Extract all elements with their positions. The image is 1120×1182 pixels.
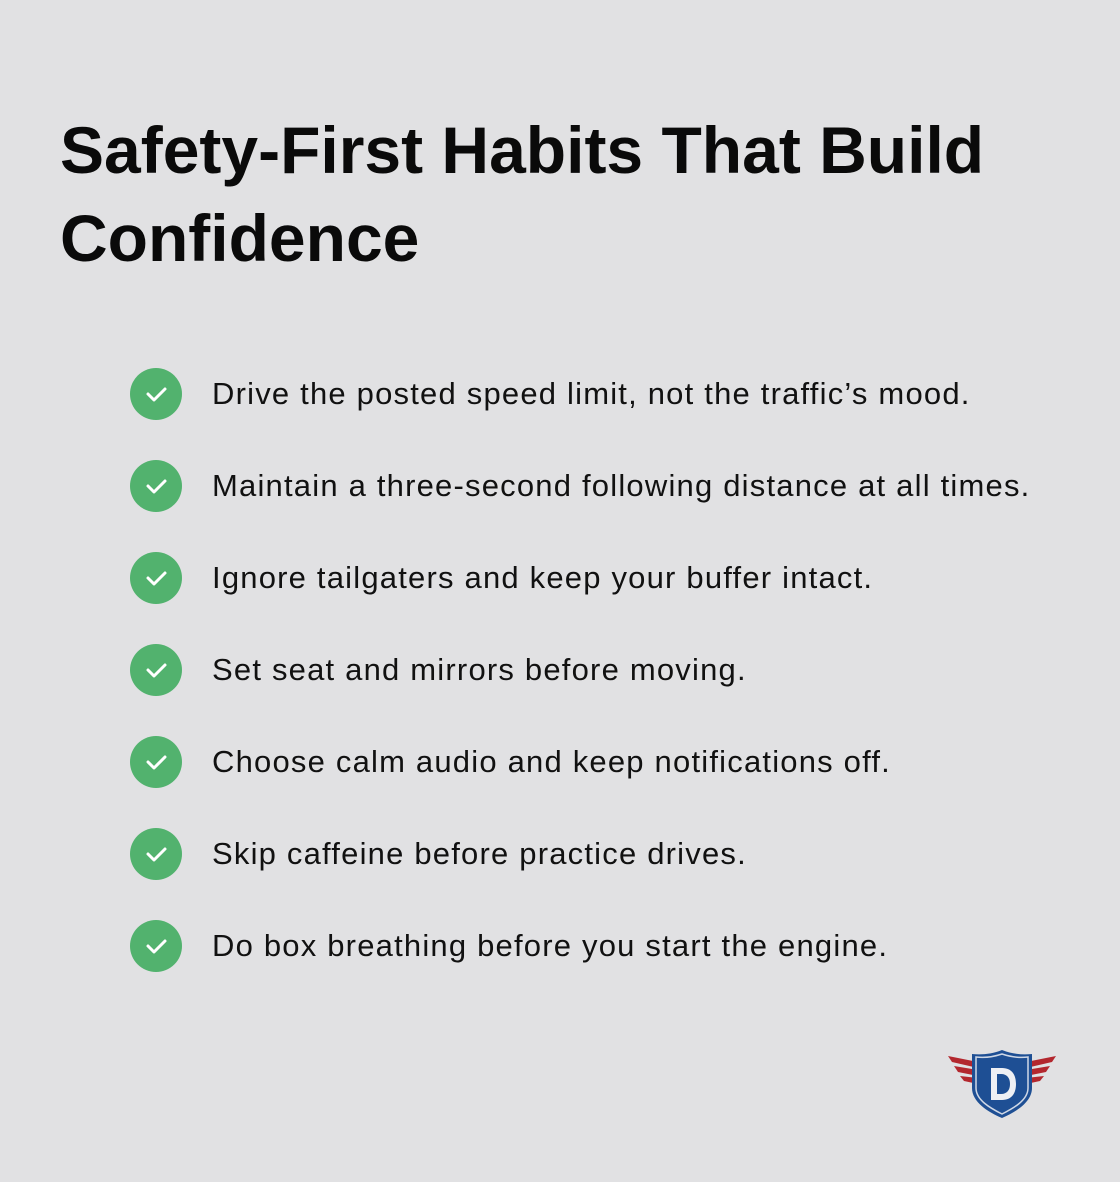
item 2 (130, 460, 1030, 512)
item 5: Choose calm audio and keep notifications off. (212, 744, 891, 779)
item 3: Ignore tailgaters and keep your buffer intact. (212, 560, 873, 595)
item 5 (130, 736, 891, 788)
item 4 (130, 644, 747, 696)
item 2: Maintain a three-second following distance at all times. (212, 468, 1030, 503)
title: Safety-First Habits That Build Confidence (60, 113, 984, 275)
item 6: Skip caffeine before practice drives. (212, 836, 747, 871)
item 4: Set seat and mirrors before moving. (212, 652, 747, 687)
item 1: Drive the posted speed limit, not the traffic’s mood. (212, 376, 971, 411)
item 7: Do box breathing before you start the engine. (212, 928, 888, 963)
item 7 (130, 920, 888, 972)
item 3 (130, 552, 873, 604)
item 1 (130, 368, 971, 420)
item 6 (130, 828, 747, 880)
logo (948, 1050, 1056, 1118)
